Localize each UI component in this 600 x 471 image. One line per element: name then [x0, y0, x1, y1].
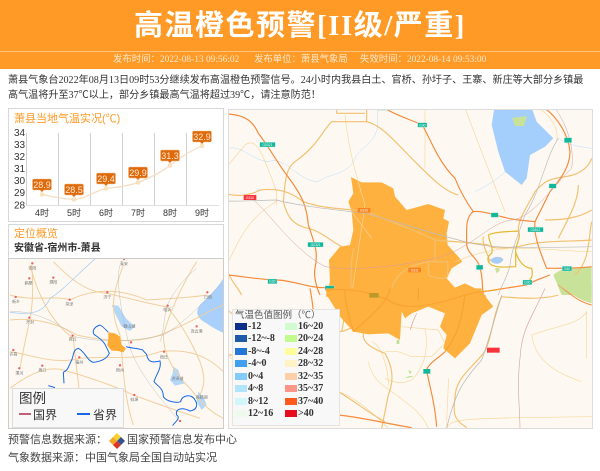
- lake island: [512, 116, 527, 126]
- key 12~16: [235, 408, 273, 419]
- key -4~0: -4~0: [248, 358, 267, 369]
- key 37~40: 37~40: [298, 396, 323, 407]
- legend title: 图例: [19, 391, 46, 406]
- key >40: >40: [298, 408, 314, 419]
- key -12: -12: [248, 321, 261, 332]
- small location map: 菏泽: [65, 300, 73, 306]
- small location map: 许昌: [9, 351, 17, 357]
- chart heading: 萧县当地气温实况(℃): [14, 113, 120, 125]
- main map: G0321: [262, 143, 272, 147]
- line chart: 28.9: [33, 180, 51, 190]
- key -12~-8: [235, 333, 275, 344]
- key >40: [285, 408, 314, 419]
- small location map: 高邮湖: [196, 393, 208, 399]
- key 0~4: 0~4: [248, 371, 263, 382]
- small location map: 蚌埠: [130, 396, 138, 402]
- key 35~37: 35~37: [298, 383, 323, 394]
- panel: temperature chart: [8, 108, 224, 222]
- small location map: 漯河: [15, 369, 23, 375]
- small location map: 宿迁: [160, 353, 168, 359]
- national border label: 国界: [33, 408, 57, 422]
- small location map: 亳州: [75, 359, 83, 365]
- lake: [492, 108, 553, 185]
- small location map: 洪泽湖: [171, 375, 183, 381]
- key -12~-8: -12~-8: [248, 333, 275, 344]
- publish info: 发布时间：2022-08-13 09:56:02: [113, 55, 239, 65]
- small location map: 新乡: [12, 298, 20, 304]
- county highlight: [107, 332, 126, 352]
- main map: G30: [419, 123, 426, 127]
- main map: G30: [564, 267, 570, 271]
- line chart: 8时: [163, 207, 177, 218]
- location path: 安徽省-宿州市-萧县: [14, 243, 101, 254]
- icon: warning center logo: [109, 433, 125, 449]
- main map: G30: [269, 280, 276, 284]
- line chart: 28.5: [65, 185, 83, 195]
- warning text: [8, 74, 583, 101]
- expiry: 失效时间：2022-08-14 09:53:00: [360, 55, 486, 65]
- key 24~28: 24~28: [298, 346, 323, 357]
- line chart: 32.9: [193, 132, 211, 142]
- key 0~4: [235, 371, 264, 382]
- small location map: 商丘: [69, 335, 77, 341]
- main map: G0512: [530, 228, 540, 232]
- main map: G310: [360, 209, 368, 213]
- key 8~12: 8~12: [248, 396, 268, 407]
- line chart: 34: [14, 128, 26, 139]
- line chart: 29.4: [97, 174, 115, 184]
- main map: G30: [524, 281, 531, 285]
- key 4~8: [235, 383, 263, 394]
- small location map: 连云港: [191, 327, 203, 333]
- line chart: 30: [14, 176, 26, 187]
- main map: G0321: [311, 243, 321, 247]
- small location map: 濮阳: [49, 279, 57, 285]
- small location map: 日照: [204, 294, 212, 299]
- line chart: [14, 128, 219, 218]
- publisher: 发布单位：萧县气象局: [254, 55, 348, 65]
- key 28~32: 28~32: [298, 358, 323, 369]
- line chart: 4时: [35, 207, 49, 218]
- key -8~-4: -8~-4: [248, 346, 270, 357]
- province border label: 省界: [93, 408, 117, 422]
- province boundary: [48, 325, 197, 426]
- small location map: 安阳: [28, 265, 36, 271]
- key 32~35: 32~35: [298, 371, 323, 382]
- panel: location overview: [8, 224, 224, 259]
- line chart: 5时: [67, 207, 81, 218]
- small location map: 宿州: [116, 367, 124, 373]
- key 24~28: [285, 346, 323, 357]
- temperature colour legend: [232, 309, 340, 426]
- key -4~0: [235, 358, 267, 369]
- main map: G311: [411, 268, 419, 272]
- key 20~24: [285, 333, 324, 344]
- small location map: 周口: [38, 367, 46, 373]
- small map legend: [12, 388, 124, 428]
- line chart: 32: [14, 152, 26, 163]
- line chart: 9时: [195, 207, 209, 218]
- small location map: 临沂: [163, 306, 171, 312]
- small location map: [8, 258, 224, 429]
- county region lower: [326, 288, 493, 358]
- small location map: 开封: [26, 319, 34, 325]
- legend heading: 气温色值图例（℃）: [235, 310, 321, 321]
- line chart: 29.9: [129, 168, 147, 178]
- county region: [326, 177, 487, 297]
- main map: [228, 109, 593, 429]
- line chart: 29: [14, 188, 26, 199]
- key 16~20: 16~20: [298, 321, 323, 332]
- key 12~16: 12~16: [248, 408, 273, 419]
- key 28~32: [285, 358, 323, 369]
- line chart: 31: [14, 164, 26, 175]
- location heading: 定位概览: [14, 228, 58, 240]
- small location map: 泰安: [120, 260, 128, 266]
- key -8~-4: [235, 346, 270, 357]
- header divider: [0, 51, 600, 52]
- province border key: [77, 413, 90, 415]
- key 4~8: 4~8: [248, 383, 263, 394]
- main map: G310: [246, 196, 254, 200]
- warning text: 高气温将升至37℃以上，部分乡镇最高气温将超过39℃，请注意防范！: [8, 90, 321, 101]
- line chart: 28: [14, 200, 26, 212]
- header banner: [0, 0, 600, 69]
- national border key: [19, 413, 31, 415]
- line chart: 33: [14, 140, 26, 151]
- small location map: 济宁: [103, 293, 111, 299]
- title: 高温橙色预警[II级/严重]: [134, 10, 466, 42]
- lake: [197, 278, 224, 333]
- warning data source: 预警信息数据来源：: [8, 434, 107, 446]
- line chart: 31.3: [161, 151, 179, 161]
- key 8~12: [235, 396, 268, 407]
- key -12: [235, 321, 261, 332]
- key 16~20: [285, 321, 323, 332]
- key 37~40: [285, 396, 323, 407]
- small location map: 鹤壁: [25, 279, 33, 285]
- line chart: 6时: [99, 207, 113, 218]
- warning text: 萧县气象台2022年08月13日09时53分继续发布高温橙色预警信号。24小时内我县白土、官桥、孙圩子、王寨、新庄等大部分乡镇最: [8, 75, 583, 86]
- weather data source: 气象数据来源：中国气象局全国自动站实况: [8, 452, 217, 464]
- key 20~24: 20~24: [298, 333, 323, 344]
- key 35~37: [285, 383, 323, 394]
- key 32~35: [285, 371, 323, 382]
- line chart: 7时: [131, 207, 145, 218]
- warning center name: 国家预警信息发布中心: [127, 434, 237, 446]
- small location map: 微山湖: [123, 323, 135, 329]
